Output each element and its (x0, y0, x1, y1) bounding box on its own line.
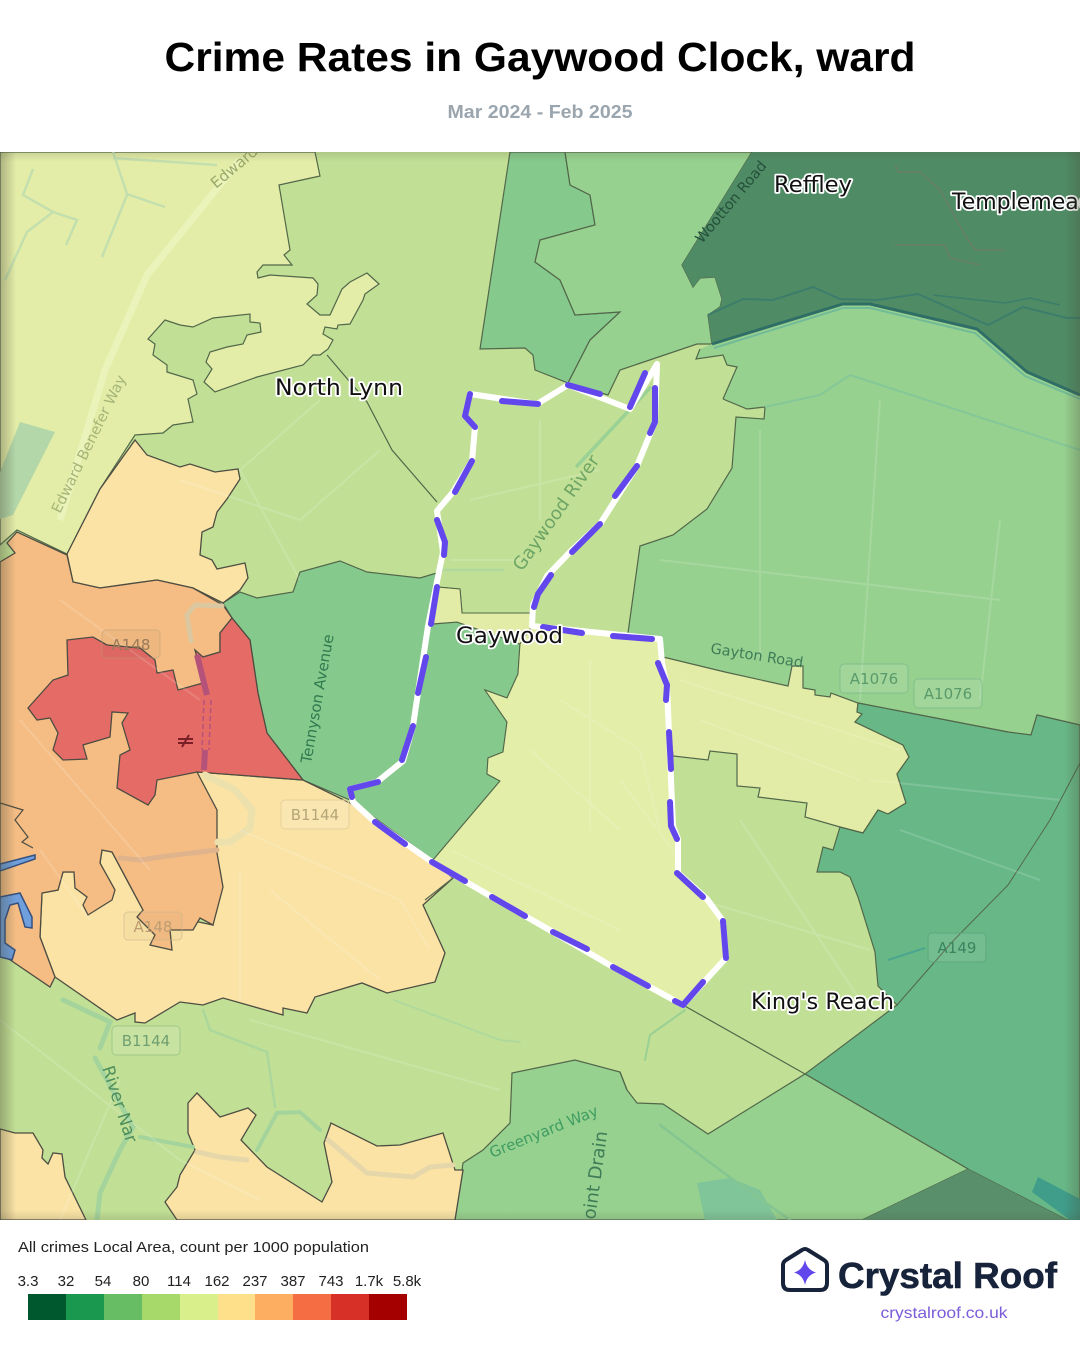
region: north-centre green wards (480, 152, 620, 383)
shield: A1076 right (914, 679, 982, 708)
title: Crime Rates in Gaywood Clock, ward (164, 34, 916, 80)
channel in east ward (765, 375, 1080, 450)
label: Greenyard Way: Greenyard Way (487, 1102, 601, 1162)
legend scale labels: 54 (95, 1273, 111, 1290)
legend (18, 1239, 422, 1320)
railway band through red ward (197, 655, 211, 770)
white underline of ward boundary (350, 364, 726, 1005)
label: Edward Benefer Way: Edward Benefer Way (49, 373, 130, 516)
label: Gaywood: Gaywood (456, 624, 563, 649)
shield: B1144 south (112, 1026, 180, 1055)
shield: B1144 south: B1144 (122, 1032, 170, 1050)
label: Gayton Road: Gayton Road (709, 641, 804, 672)
shield: A149: A149 (938, 939, 976, 957)
legend scale labels: 32 (58, 1273, 74, 1290)
label: Wootton Road: Wootton Road (693, 158, 770, 247)
legend scale labels: 237 (242, 1273, 268, 1290)
shield: A148 north (102, 630, 160, 658)
shield: A148 north: A148 (112, 636, 150, 654)
legend title: All crimes Local Area, count per 1000 population (18, 1239, 369, 1256)
region: town-centre orange ward (0, 532, 232, 987)
region: red high-crime ward (28, 618, 303, 805)
label: Reffley: Reffley (774, 173, 852, 198)
shield: A1076 left: A1076 (850, 670, 898, 688)
west inner boundary (0, 803, 33, 848)
road: Edward Benefer Way (60, 160, 240, 520)
logo: Crystal Roof (783, 1249, 1058, 1322)
subtitle: date range: Mar 2024 - Feb 2025 (448, 102, 632, 122)
region: south-east dark green ward (805, 703, 1080, 1220)
legend scale labels: 80 (133, 1273, 149, 1290)
legend scale labels: 162 (204, 1273, 230, 1290)
region: bottom-centre peach ward (165, 1093, 463, 1220)
legend scale labels: 387 (280, 1273, 306, 1290)
region: east green ward (628, 304, 1080, 735)
region: bottom-left peach ward (0, 1129, 86, 1220)
inner boundary lines (327, 355, 805, 1090)
map panel (0, 142, 1080, 1221)
label: King's Reach: King's Reach (751, 990, 894, 1015)
region: small pale sliver (431, 587, 532, 644)
teal water feature (1032, 1177, 1080, 1220)
ward arc line (897, 763, 1080, 1005)
label: North Lynn: North Lynn (275, 376, 403, 401)
label: Tennyson Avenue: Tennyson Avenue (297, 633, 338, 766)
river lines in dark ward (708, 165, 1080, 325)
region: Tennyson dark-green ward (223, 561, 520, 860)
region: east pale ward (663, 657, 909, 833)
legend scale labels: 5.8k (393, 1273, 422, 1290)
place labels (275, 173, 1080, 1015)
shield: A1076 right: A1076 (924, 685, 972, 703)
region: north peach ward (67, 440, 248, 603)
legend scale labels (18, 1273, 422, 1290)
logo wordmark: Crystal Roof (838, 1255, 1058, 1296)
label: Gaywood River: Gaywood River (509, 451, 605, 575)
ward boundary: dashed route (350, 364, 726, 1005)
legend scale labels: 1.7k (355, 1273, 384, 1290)
region: southern dark ward (862, 1169, 1067, 1220)
water channels in north-west (5, 152, 217, 280)
label: Point Drain: oint Drain (579, 1130, 612, 1221)
blue harbour water (0, 855, 35, 960)
shield: B1144 centre (281, 800, 349, 829)
logo url: crystalroof.co.uk (880, 1305, 1009, 1322)
icon: house with star (783, 1249, 827, 1290)
street network (0, 400, 1060, 1220)
legend scale labels: 114 (167, 1273, 191, 1290)
legend scale labels: 743 (318, 1273, 344, 1290)
shield: A148 south (124, 912, 182, 940)
shield: A148 south: A148 (134, 918, 172, 936)
region: waterbody strip (0, 422, 55, 519)
region: central peach ward (40, 772, 453, 1023)
road shields (102, 630, 986, 1055)
river channels (63, 388, 790, 1220)
icon: railway station (178, 735, 193, 747)
region: north-east darkest ward (682, 152, 1080, 395)
purple dashes of ward boundary (350, 373, 726, 1005)
label: River Nar: River Nar (97, 1063, 141, 1145)
label: Edward: Edward (207, 142, 261, 192)
shield: B1144 centre: B1144 (291, 806, 339, 824)
pond (697, 1178, 777, 1220)
region: north-west pale ward (0, 152, 379, 554)
region: Gaywood south pale ward (433, 626, 725, 1003)
shield: A1076 left (840, 664, 908, 693)
shield: A149 (928, 933, 986, 962)
legend scale labels: 3.3 (18, 1273, 38, 1290)
region: southern green ward (455, 1060, 968, 1220)
legend colour bar (28, 1294, 407, 1320)
road labels (49, 142, 804, 1221)
thick teal river edge of east ward (712, 304, 1080, 395)
map edge vignette (0, 152, 1080, 1220)
